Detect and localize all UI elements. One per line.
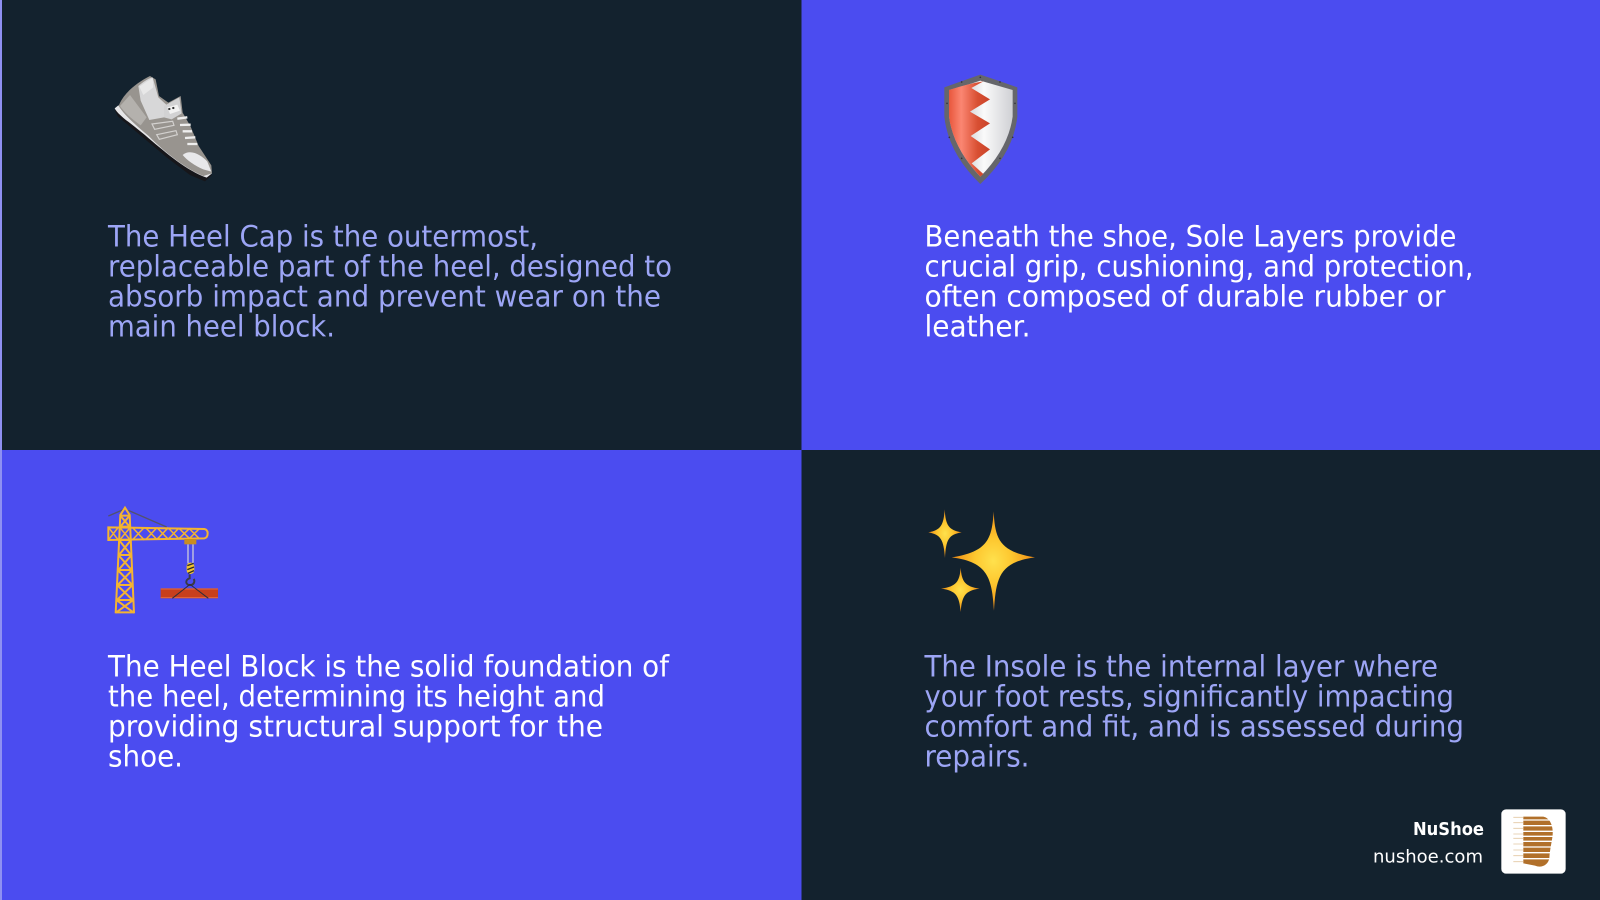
icon: crane (108, 508, 218, 613)
text: sole layers description: Beneath the shoe, Sole Layers provide (924, 220, 1456, 254)
text: heel cap description: The Heel Cap is the outermost, (107, 220, 538, 254)
text: heel block description: the heel, determining its height and (108, 680, 605, 714)
text: sole layers description: leather. (924, 310, 1030, 344)
text: heel block description (107, 650, 670, 774)
brand: NuShoe name and URL (1373, 819, 1484, 868)
text: heel cap description: main heel block. (108, 310, 335, 344)
left edge strip (0, 0, 2, 900)
text: sole layers description: often composed of durable rubber or (924, 280, 1446, 314)
panel: sole layers (802, 0, 1600, 450)
logo: NuShoe foot mark (1501, 809, 1566, 874)
brand: NuShoe name and URL: nushoe.com (1373, 846, 1483, 868)
text: heel block description: shoe. (108, 740, 183, 774)
text: heel block description: The Heel Block is the solid foundation of (107, 650, 670, 684)
icon: shield (944, 75, 1017, 184)
panel: heel block (2, 450, 802, 900)
panel: insole (802, 450, 1600, 900)
icon: sparkles (928, 509, 1035, 612)
icon: sneaker (115, 76, 212, 181)
text: insole description: your foot rests, significantly impacting (924, 680, 1454, 714)
panel: heel cap (2, 0, 802, 450)
text: heel cap description: replaceable part of the heel, designed to (108, 250, 672, 284)
text: insole description: repairs. (924, 740, 1030, 774)
text: insole description: comfort and fit, and is assessed during (924, 710, 1464, 744)
text: sole layers description: crucial grip, cushioning, and protection, (924, 250, 1474, 284)
brand: NuShoe name and URL: NuShoe (1413, 819, 1484, 840)
text: heel block description: providing structural support for the (108, 710, 603, 744)
text: insole description (924, 650, 1464, 774)
text: heel cap description (107, 220, 672, 344)
text: insole description: The Insole is the internal layer where (924, 650, 1438, 684)
text: sole layers description (924, 220, 1474, 344)
text: heel cap description: absorb impact and prevent wear on the (108, 280, 661, 314)
